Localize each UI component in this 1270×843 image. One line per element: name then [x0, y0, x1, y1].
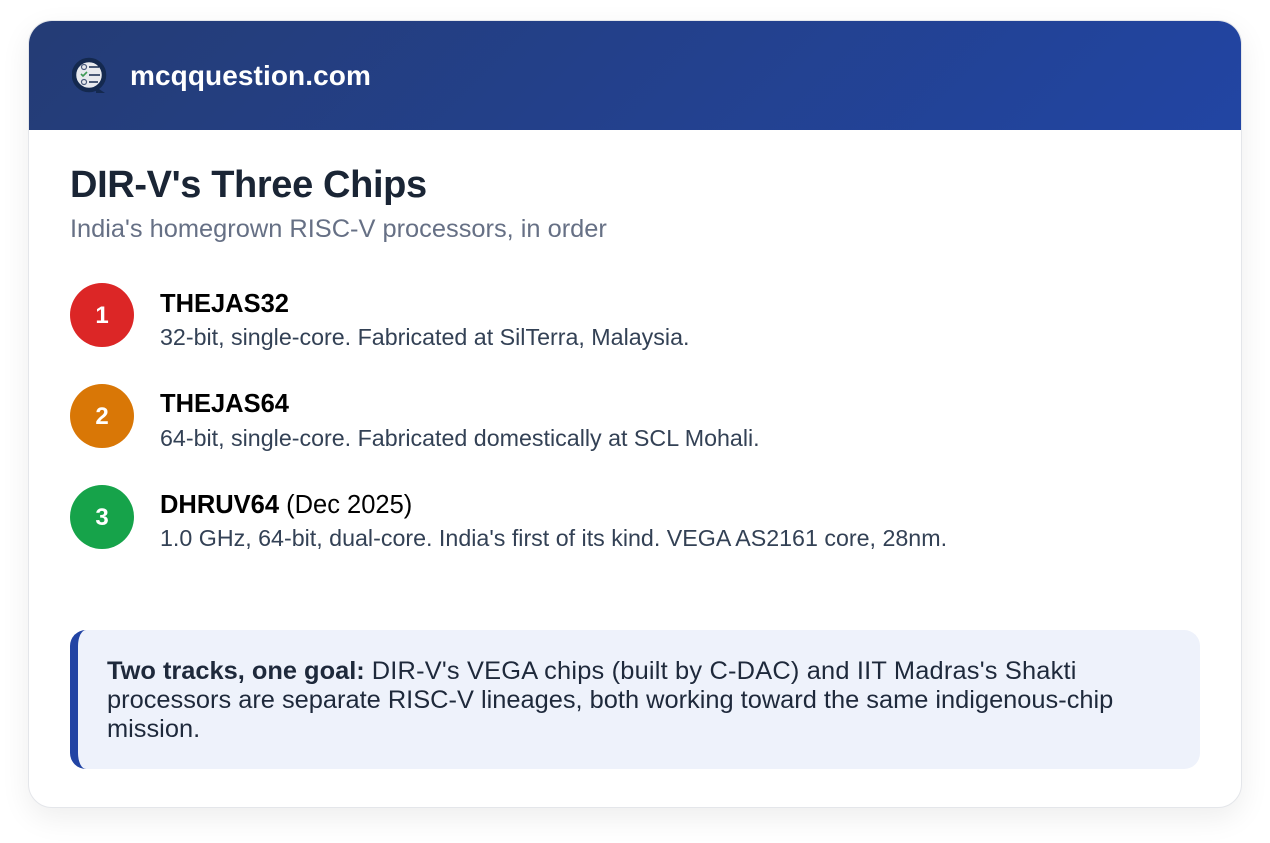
number badge 2: 2 [95, 403, 109, 430]
item 3 [70, 485, 947, 551]
callout text: mission. [107, 715, 200, 743]
title: DIR-V's Three Chips [70, 164, 427, 206]
number badge 3: 3 [95, 504, 109, 531]
icon: quiz magnifier logo [72, 58, 106, 93]
item 2 heading: THEJAS64 [160, 390, 289, 418]
number badge 3 [70, 485, 134, 549]
callout text: Two tracks, one goal: DIR-V's VEGA chips (built by C-DAC) and IIT Madras's Shakti [107, 657, 1077, 685]
item 1 [70, 283, 689, 350]
site name: mcqquestion.com [130, 60, 371, 91]
item 2 [70, 384, 760, 451]
item 1 description: 32-bit, single-core. Fabricated at SilTerra, Malaysia. [160, 324, 689, 350]
callout text [107, 657, 1113, 743]
number badge 2 [70, 384, 134, 448]
number badge 1: 1 [95, 302, 109, 329]
subtitle: India's homegrown RISC-V processors, in order [70, 215, 607, 243]
item 1 heading: THEJAS32 [160, 290, 289, 318]
header band [29, 21, 1243, 130]
callout text: processors are separate RISC-V lineages, both working toward the same indigenous-chip [107, 686, 1113, 714]
callout [70, 630, 1200, 769]
item 3 description: 1.0 GHz, 64-bit, dual-core. India's first of its kind. VEGA AS2161 core, 28nm. [160, 525, 947, 551]
number badge 1 [70, 283, 134, 347]
item 2 description: 64-bit, single-core. Fabricated domestically at SCL Mohali. [160, 425, 760, 451]
item 3 heading: DHRUV64 (Dec 2025) [160, 491, 412, 519]
